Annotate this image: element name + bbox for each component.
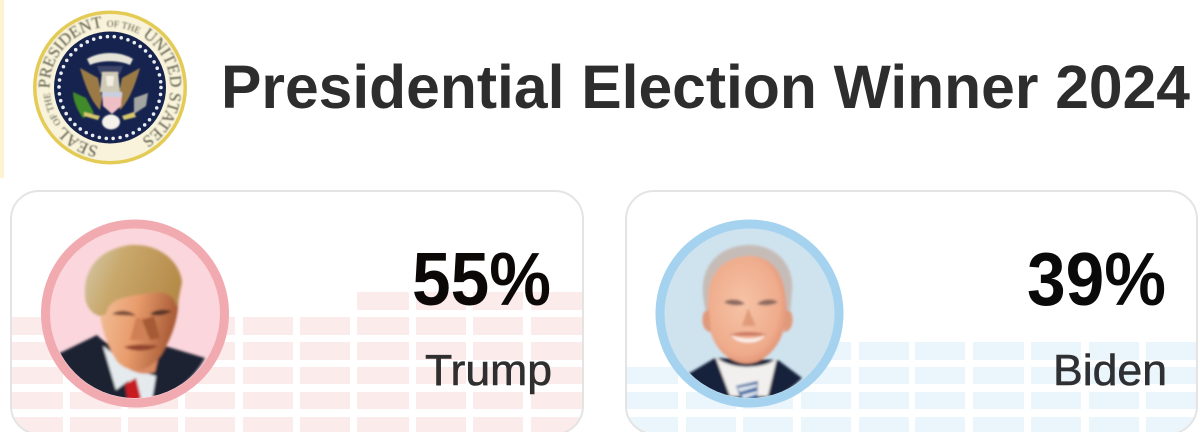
seal ring lettering: SEAL OF THE PRESIDENT OF THE UNITED STATES: [38, 16, 182, 158]
avatar: Trump portrait: [41, 220, 229, 408]
panel: Biden: [626, 191, 1197, 432]
seal eagle: [73, 53, 148, 130]
value: Trump percentage: 55%: [412, 237, 551, 321]
blue bar chart backdrop: [626, 342, 1197, 432]
value: Biden percentage: 39%: [1027, 237, 1166, 321]
pink bar chart backdrop: [11, 292, 583, 432]
label: Trump: Trump: [425, 346, 552, 395]
avatar: Biden portrait: [656, 220, 844, 408]
icon: presidential seal: [33, 10, 187, 164]
title: Presidential Election Winner 2024: [221, 53, 1190, 121]
decorative page edge strip: [0, 0, 4, 178]
panel: Trump: [11, 191, 583, 432]
label: Biden: Biden: [1053, 346, 1167, 395]
